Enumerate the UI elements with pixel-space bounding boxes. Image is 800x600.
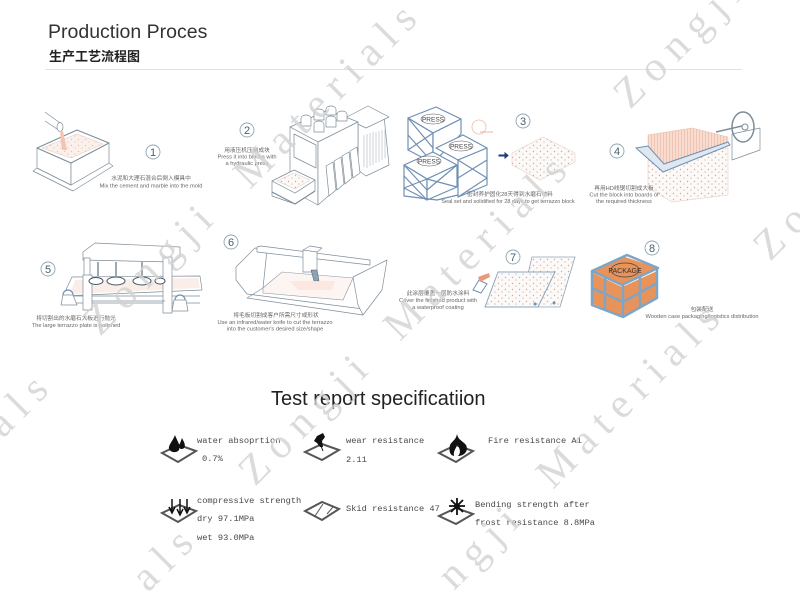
spec: skid resistance: Skid resistance 47 bbox=[346, 504, 440, 514]
step 4 caption: 再用HD线锯切割成大板 bbox=[594, 184, 654, 192]
spec: compressive strength: dry 97.1MPa bbox=[197, 514, 254, 524]
step 4 number bbox=[610, 144, 624, 158]
watermark: Materials bbox=[375, 141, 583, 349]
step 5: polishing machine bbox=[61, 243, 202, 313]
step 6 number bbox=[224, 235, 238, 249]
icon: water absorption bbox=[162, 435, 196, 462]
spec: compressive strength: compressive strength bbox=[197, 496, 301, 506]
step 3: sealed stacks bbox=[404, 107, 575, 200]
step 5 caption bbox=[32, 314, 120, 329]
spec: fire resistance: Fire resistance A1 bbox=[488, 436, 582, 446]
step 3 number bbox=[516, 114, 530, 128]
step 8 caption bbox=[645, 305, 759, 320]
step 7 number: 7 bbox=[510, 252, 516, 264]
step 3: sealed stacks: PRESS bbox=[418, 158, 441, 166]
spec: wear resistance bbox=[346, 436, 424, 465]
step 8 caption: 包装配送 bbox=[691, 305, 714, 313]
step 8: wooden case package bbox=[591, 255, 658, 317]
step 2 caption: 用液压机压制成块 bbox=[224, 146, 270, 154]
icon: fire resistance bbox=[439, 434, 473, 462]
watermark: als bbox=[123, 513, 209, 600]
icon: compressive strength bbox=[162, 499, 196, 522]
step 6 caption: into the customer's desired size/shape bbox=[227, 326, 323, 332]
spec: bending strength: Bending strength after bbox=[475, 500, 590, 510]
step 7: coated slabs bbox=[473, 257, 575, 307]
step 3: sealed stacks: PRESS bbox=[422, 116, 445, 124]
step 3 caption bbox=[441, 190, 575, 205]
step 1 number bbox=[146, 145, 160, 159]
icon: skid resistance bbox=[305, 502, 339, 520]
step 5 caption: 将切割出的水磨石大板进行抛光 bbox=[36, 314, 116, 322]
spec: compressive strength bbox=[197, 496, 301, 543]
step 5 number: 5 bbox=[45, 264, 51, 276]
step 7 caption bbox=[399, 289, 477, 311]
step 7 caption: a waterproof coating bbox=[412, 305, 464, 311]
heading: test report: Test report specificatiion bbox=[271, 388, 486, 410]
step 2 number: 2 bbox=[244, 125, 250, 137]
step 2: hydraulic press bbox=[272, 106, 389, 205]
step 7 number bbox=[506, 250, 520, 264]
spec: bending strength: frost resistance 8.8MPa bbox=[475, 518, 595, 528]
spec: compressive strength: wet 93.0MPa bbox=[197, 533, 254, 543]
icon: wear resistance bbox=[305, 433, 339, 460]
step 7 caption: 此涂层覆盖一层防水涂料 bbox=[407, 289, 470, 297]
step 1 caption: 水泥和大理石混合后倒入模具中 bbox=[111, 174, 191, 182]
step 4: block cutting bbox=[636, 112, 760, 202]
step 4 number: 4 bbox=[614, 146, 620, 158]
step 4 caption: the required thickness bbox=[596, 199, 652, 205]
step 1 number: 1 bbox=[150, 147, 156, 159]
step 6 caption: Use an infrared/water knife to cut the terrazzo bbox=[217, 320, 333, 326]
step 6 caption: 将毛板切割成客户所需尺寸或形状 bbox=[233, 311, 319, 319]
watermark: Materials bbox=[528, 289, 736, 497]
spec: bending strength bbox=[475, 500, 595, 528]
step 2 caption: a hydraulic press bbox=[226, 161, 269, 167]
watermark: Zongji bbox=[75, 190, 229, 344]
step 2 caption: Press it into blocks with bbox=[217, 154, 277, 160]
step 6 caption bbox=[217, 311, 333, 332]
step 5 caption: The large terrazzo plate is polished bbox=[32, 323, 120, 329]
step 5 number bbox=[41, 262, 55, 276]
step 2 caption bbox=[217, 146, 277, 167]
step 1 caption bbox=[100, 174, 202, 190]
step 6 number: 6 bbox=[228, 237, 234, 249]
step 3: sealed stacks: PRESS bbox=[450, 144, 473, 150]
step 1 caption: Mix the cement and marble into the mold bbox=[100, 184, 202, 190]
spec: wear resistance: wear resistance bbox=[346, 436, 424, 446]
spec: wear resistance: 2.11 bbox=[346, 455, 367, 465]
step 7 caption: Cover the finished product with bbox=[399, 298, 477, 304]
step 8 number bbox=[645, 241, 659, 255]
icon: frost resistance bbox=[439, 498, 473, 524]
step 3 caption: 密封养护固化28天得到水磨石块料 bbox=[467, 190, 553, 198]
step 3 number: 3 bbox=[520, 116, 526, 128]
step 3 caption: Seal set and solidified for 28 days to get terrazzo block bbox=[441, 199, 575, 205]
step 4 caption bbox=[589, 184, 659, 205]
step 8: wooden case package: PACKAGE bbox=[608, 268, 642, 275]
watermark: ngji bbox=[429, 491, 536, 598]
spec: water absorption bbox=[197, 436, 280, 464]
title: Production Proces bbox=[48, 21, 208, 43]
spec: water absorption: 0.7% bbox=[202, 454, 224, 464]
step 8 number: 8 bbox=[649, 243, 655, 255]
subtitle: 生产工艺流程图 bbox=[49, 49, 140, 64]
spec: water absorption: water absoprtion bbox=[197, 436, 280, 446]
watermark: Zongji bbox=[230, 340, 384, 494]
step 4 caption: Cut the block into boards of bbox=[589, 192, 659, 198]
step 2 number bbox=[240, 123, 254, 137]
step 6: water knife cutter bbox=[236, 246, 387, 315]
step 8 caption: Wooden case packaging/logistics distribution bbox=[645, 314, 759, 320]
step 1: mix in mold bbox=[33, 112, 113, 191]
